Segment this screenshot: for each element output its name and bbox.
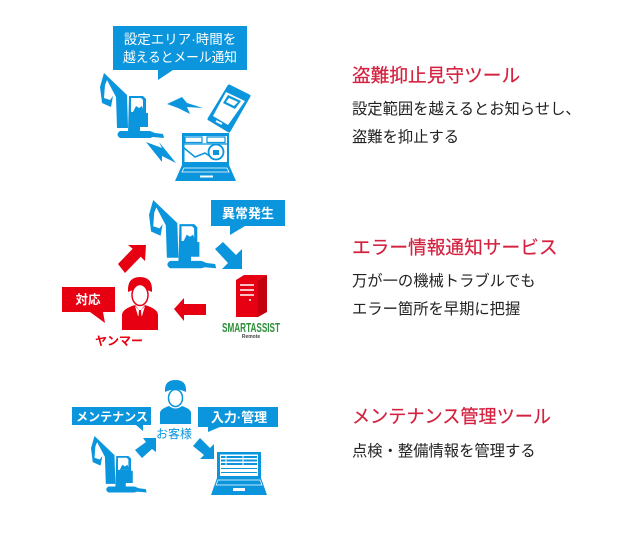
logo: Smart Assist Remote [222, 321, 280, 340]
callout: abnormality [211, 200, 285, 235]
panel: maintenance diagram [72, 380, 278, 495]
arrow: to customer [135, 438, 156, 458]
callout: notification bubble [113, 26, 247, 80]
callout: response: 対応 [75, 292, 101, 307]
callout: maintenance [72, 407, 151, 431]
callout: input and manage: 入力·管理 [211, 410, 267, 425]
heading: anti-theft: 盗難抑止見守ツール [352, 65, 520, 86]
heading: error notification: エラー情報通知サービス [352, 237, 558, 258]
text: anti-theft description [352, 100, 581, 146]
panel: anti-theft diagram [100, 26, 249, 181]
callout: response [62, 287, 115, 323]
text: error description: エラー箇所を早期に把握 [352, 301, 520, 318]
logo: Smart Assist Remote: Remote [242, 334, 260, 340]
callout: maintenance: メンテナンス [76, 410, 148, 424]
callout: input and manage [198, 407, 278, 432]
callout: notification bubble: 越えるとメール通知 [123, 49, 237, 65]
icon: server [236, 275, 267, 317]
icon: lightning bolt to phone [167, 97, 203, 114]
logo: Smart Assist Remote: SMARTASSIST [222, 321, 280, 335]
icon: Yanmar staff [122, 277, 158, 330]
panel: error notification diagram [62, 200, 285, 348]
text: anti-theft description: 盗難を抑止する [352, 129, 459, 146]
icon: excavator [100, 73, 164, 138]
icon: laptop with table [211, 452, 267, 495]
arrow: to Yanmar [174, 298, 206, 321]
heading: maintenance: メンテナンス管理ツール [352, 406, 551, 427]
text: anti-theft description: 設定範囲を越えるとお知らせし、 [352, 100, 581, 118]
label: customer: お客様 [156, 427, 192, 441]
icon: lightning bolt to laptop [146, 142, 176, 163]
text: error description: 万が一の機械トラブルでも [352, 272, 536, 290]
label: Yanmar: ヤンマー [95, 334, 143, 348]
icon: laptop with map [175, 133, 236, 181]
text: error description [352, 272, 536, 318]
icon: smartphone [209, 86, 249, 131]
arrow: to excavator [118, 245, 146, 273]
text: maintenance description: 点検・整備情報を管理する [352, 442, 536, 460]
arrow: to laptop [193, 438, 214, 459]
icon: excavator [149, 200, 216, 268]
arrow: to server [215, 242, 242, 269]
callout: abnormality: 異常発生 [222, 206, 274, 221]
icon: customer [160, 380, 191, 424]
icon: excavator [91, 436, 147, 493]
callout: notification bubble: 設定エリア·時間を [124, 32, 236, 47]
